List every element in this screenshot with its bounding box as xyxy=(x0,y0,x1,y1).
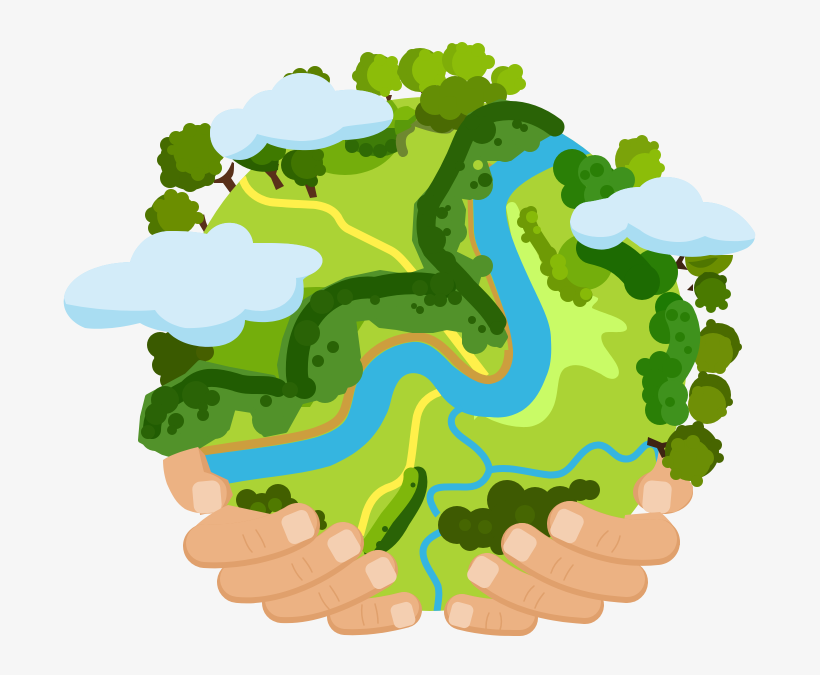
shrub bush beside the meadow xyxy=(517,206,613,307)
finger 3 xyxy=(282,555,399,609)
cloud top xyxy=(210,73,393,160)
darker meadow top xyxy=(294,100,398,175)
trees behind the globe: top row xyxy=(283,42,526,105)
right forest xyxy=(553,149,692,426)
finger 1 xyxy=(184,505,317,552)
right hand fingers xyxy=(447,506,680,630)
trees behind the globe: right side xyxy=(615,135,742,424)
meadow tree behind cloud xyxy=(345,106,420,158)
left hand fingers xyxy=(184,505,417,629)
yellow road lower xyxy=(360,392,440,535)
forest rounded lobes xyxy=(310,132,540,403)
lower forest lobes xyxy=(141,404,284,458)
forest lower left xyxy=(141,363,300,458)
bush bottom left xyxy=(236,484,327,530)
globe base xyxy=(173,97,687,611)
finger 1 xyxy=(548,506,680,552)
finger 4 xyxy=(345,601,417,629)
trees on the globe below first cloud xyxy=(223,139,326,198)
tree: large upper left xyxy=(157,123,239,194)
river bank xyxy=(200,337,509,452)
cloud left xyxy=(64,223,322,347)
darker meadow left xyxy=(206,287,364,407)
globe surface: terrain, roads and river xyxy=(200,100,659,611)
tree on right thumb xyxy=(647,421,724,487)
cloud right xyxy=(570,177,755,257)
stream branches xyxy=(423,408,660,612)
yellow road upper xyxy=(242,177,422,281)
finger 3 xyxy=(465,553,585,608)
finger 2 xyxy=(238,527,363,582)
olive tree behind left forest xyxy=(147,329,214,390)
forest dark canopy xyxy=(426,111,555,322)
tree: lower left behind cloud xyxy=(145,189,210,237)
right thumb xyxy=(633,448,693,514)
forest along the river xyxy=(280,102,558,403)
left thumb xyxy=(163,447,233,515)
bush bottom right xyxy=(438,479,600,555)
bright meadow right xyxy=(474,202,627,427)
illustration: globe held in two hands xyxy=(64,42,756,636)
finger 2 xyxy=(501,526,627,582)
yellow road middle xyxy=(445,325,485,377)
river xyxy=(200,130,595,488)
finger 4 xyxy=(447,601,520,630)
central bush near lower road xyxy=(368,475,419,550)
olive tree at globe top xyxy=(410,76,507,134)
